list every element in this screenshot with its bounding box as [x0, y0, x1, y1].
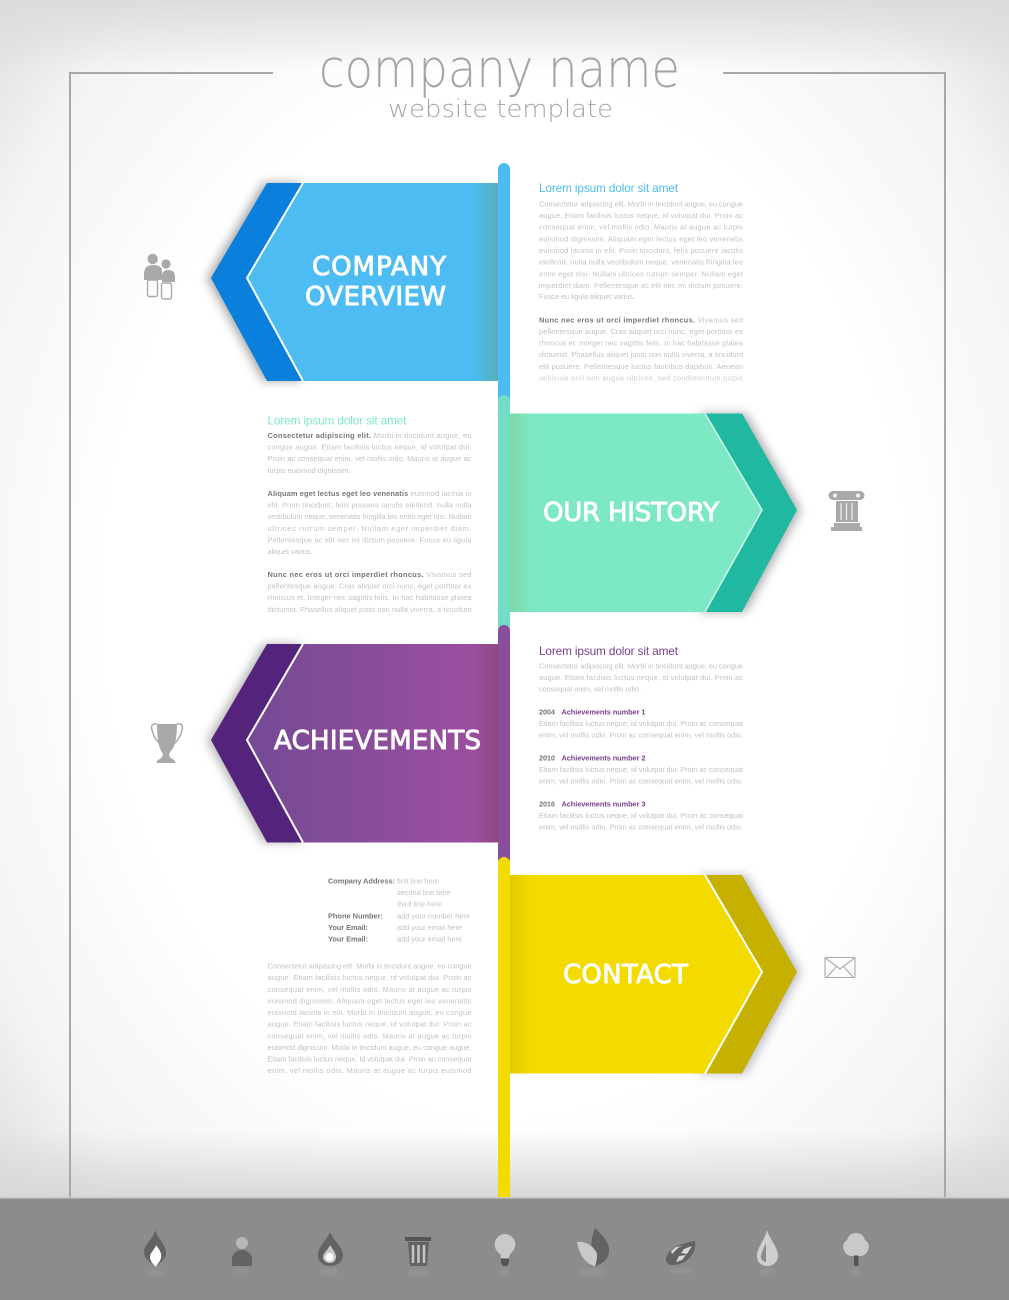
text block: achievements: Etiam facilisis luctus neque, id volutpat dui. Proin ac consequat	[539, 719, 743, 728]
icon: water flame	[318, 1232, 343, 1266]
text block: our history: Lorem ipsum dolor sit amet	[268, 414, 407, 428]
title: company name	[319, 39, 680, 100]
icon: bin	[405, 1237, 431, 1266]
heading: company overview: COMPANY	[312, 252, 446, 282]
text block: our history: Proin ac consequat enim, vel mollis odio. Mauris at augue ac	[268, 454, 472, 463]
footer bar	[0, 1197, 1009, 1300]
arrow: achievements	[207, 644, 498, 842]
icon: light bulb	[495, 1234, 515, 1266]
text block: contact details: second line here	[397, 888, 451, 897]
text block: company overview: enim eget nisi. Nullam ultrices rutrum semper. Nullam eget	[539, 269, 743, 278]
text block: company overview: Fusce eu ligula aliquet varius.	[539, 292, 635, 301]
heading: our history: OUR HISTORY	[543, 498, 719, 528]
title	[319, 39, 680, 123]
text block: our history: Nunc nec eros ut orci imperdiet rhoncus. Vivamus sed	[268, 570, 472, 579]
text block: contact details: enim, vel mollis odio. Mauris at augue ac turpis euismod	[268, 1066, 472, 1075]
arrow: company overview	[207, 183, 498, 381]
text block: company overview: euismod lacinia in elit. Proin tincidunt, felis posuere iaculis	[539, 246, 743, 255]
text block: contact details	[268, 876, 472, 1075]
text block: contact details: Phone Number:	[328, 911, 383, 920]
heading: company overview	[305, 252, 446, 312]
text block: achievements: Etiam facilisis luctus neque, id volutpat dui. Proin ac consequat	[539, 765, 743, 774]
text block: contact details: augue. Etiam facilisis luctus neque, id volutpat dui. Proin ac	[268, 973, 472, 982]
text block: company overview: rhoncus et. Integer nec sagittis felis. In hac habitasse platea	[539, 339, 744, 348]
text block: achievements: Lorem ipsum dolor sit amet	[539, 644, 679, 658]
text block: our history: dictumst. Phasellus aliquet justo non nulla viverra, a tincidunt	[268, 605, 472, 614]
icon: tree	[843, 1233, 869, 1266]
text block: our history: Consectetur adipiscing elit. Morbi in tincidunt augue, eu	[268, 431, 472, 440]
text block: achievements: 2016	[539, 800, 555, 808]
icon reflections	[147, 1268, 860, 1276]
text block: contact details: add your number here	[397, 911, 470, 920]
icon: column	[828, 491, 864, 531]
icon: flame	[144, 1230, 166, 1267]
text block: our history: ultrices rutrum semper. Nullam eget imperdiet diam.	[268, 524, 472, 533]
text block: our history: Pellentesque ac elit nec mi dictum posuere. Fusce eu ligula	[268, 535, 472, 544]
text block: company overview: augue. Etiam facilisis luctus neque, id volutpat dui. Proin ac	[539, 211, 743, 220]
text block: contact details: euismod lacinia in elit. Morbi in tincidunt augue, eu congue	[268, 1008, 472, 1017]
text block: contact details: consequat enim, vel mollis odio. Mauris at augue ac turpis	[268, 985, 472, 994]
text block: contact details: Your Email:	[328, 923, 368, 932]
text block: our history: vestibulum neque, venenatis fringilla leo enim eget nisi. Nullam	[268, 512, 472, 521]
text block: contact details: Company Address:	[328, 876, 395, 886]
text block: achievements: enim, vel mollis odio. Proin ac consequat enim, vel mollis odio.	[539, 777, 743, 786]
icon: trophy	[152, 724, 182, 763]
text block: company overview: imperdiet diam. Pellentesque ac elit nec mi dictum posuere.	[539, 281, 743, 290]
text block: achievements: augue. Etiam facilisis luctus neque, id volutpat dui. Proin ac	[539, 673, 743, 682]
text block: contact details: first line here	[397, 876, 439, 886]
text block: our history: rhoncus et. Integer nec sagittis felis. In hac habitasse platea	[268, 593, 472, 602]
text block: company overview: pellentesque augue. Cras aliquet orci nunc, eget porttitor ex	[539, 327, 743, 336]
text block: our history: turpis euismod dignissim.	[268, 466, 350, 475]
text block: company overview	[539, 181, 744, 382]
text block: company overview: Nunc nec eros ut orci imperdiet rhoncus. Vivamus sed	[539, 316, 743, 324]
arrow: contact	[510, 875, 801, 1074]
text block: contact details: euismod dignissim. Aliquam eget lectus eget leo venenatis	[268, 996, 472, 1006]
icon: striped leaf	[666, 1241, 695, 1265]
text block: company overview: Lorem ipsum dolor sit amet	[539, 181, 679, 195]
subtitle: website template	[388, 95, 613, 123]
text block: achievements: consequat enim, vel mollis odio.	[539, 685, 641, 694]
text block: contact details: third line here	[397, 900, 442, 909]
text block: contact details: add your email here	[397, 934, 462, 944]
icon: water drop	[757, 1230, 778, 1266]
text block: company overview: consequat enim, vel mollis odio. Mauris at augue ac turpis	[539, 223, 743, 232]
heading: achievements: ACHIEVEMENTS	[274, 726, 481, 756]
text block: achievements: Achievements number 2	[562, 754, 646, 762]
icon: person	[232, 1237, 252, 1266]
text block: achievements: Achievements number 3	[562, 800, 646, 808]
text block: our history: elit. Proin tincidunt, felis posuere iaculis eleifend, nulla nulla	[268, 501, 472, 510]
heading: company overview: OVERVIEW	[305, 282, 446, 312]
text block: achievements: Etiam facilisis luctus neque, id volutpat dui. Proin ac consequat	[539, 811, 743, 820]
text block: contact details: Your Email:	[328, 934, 368, 944]
text block: contact details: augue. Etiam facilisis luctus neque, id volutpat dui. Proin ac	[268, 1020, 472, 1029]
text block: achievements: 2004	[539, 708, 556, 716]
text block: our history: aliquet varius.	[268, 547, 312, 556]
text block: achievements: Consectetur adipiscing elit. Morbi in tincidunt augue, eu congue	[539, 662, 743, 670]
text block: contact details: consequat enim, vel mollis odio. Mauris at augue ac turpis	[268, 1031, 472, 1040]
arrow: our history	[510, 414, 801, 612]
text block: our history	[268, 414, 472, 614]
text block: achievements: Achievements number 1	[562, 708, 646, 716]
text block: company overview: eleifend, nulla nulla vestibulum neque, venenatis fringilla leo	[539, 258, 743, 267]
icon: two leaves	[577, 1228, 609, 1266]
text block: achievements: enim, vel mollis odio. Proin ac consequat enim, vel mollis odio.	[539, 823, 743, 832]
text block: company overview: elit posuere. Pellentesque luctus faucibus dapibus. Aenean	[539, 362, 743, 371]
timeline ribbon	[498, 163, 510, 1198]
text block: company overview: euismod dignissim. Aliquam eget lectus eget leo venenatis	[539, 234, 743, 243]
icon: people	[144, 254, 175, 299]
text block: contact details: euismod dignissim. Morbi in tincidunt augue, eu congue augue.	[268, 1043, 472, 1052]
text block: company overview: dictumst. Phasellus aliquet justo non nulla viverra, a tincidunt	[539, 350, 743, 359]
text block: contact details: add your email here	[397, 923, 462, 932]
text block: contact details: Etiam facilisis luctus neque, id volutpat dui. Proin ac consequat	[268, 1055, 472, 1064]
icon: envelope	[825, 958, 855, 978]
text block: achievements	[539, 644, 743, 832]
text block: our history: pellentesque augue. Cras aliquet orci nunc, eget porttitor ex	[268, 582, 472, 591]
text block: company overview: vehicula orci non augue ultrices, sed condimentum turpis	[539, 373, 743, 382]
text block: achievements: 2010	[539, 754, 555, 762]
text block: contact details: Consectetur adipiscing elit. Morbi in tincidunt augue, eu congue	[268, 962, 472, 970]
text block: company overview: Consectetur adipiscing elit. Morbi in tincidunt augue, eu congue	[539, 200, 743, 208]
text block: our history: congue augue. Etiam facilisis luctus neque, id volutpat dui.	[268, 443, 472, 452]
text block: our history: Aliquam eget lectus eget leo venenatis euismod lacinia in	[268, 489, 472, 498]
text block: achievements: enim, vel mollis odio. Proin ac consequat enim, vel mollis odio.	[539, 731, 743, 740]
page frame	[70, 73, 945, 1198]
heading: contact: CONTACT	[563, 960, 688, 990]
